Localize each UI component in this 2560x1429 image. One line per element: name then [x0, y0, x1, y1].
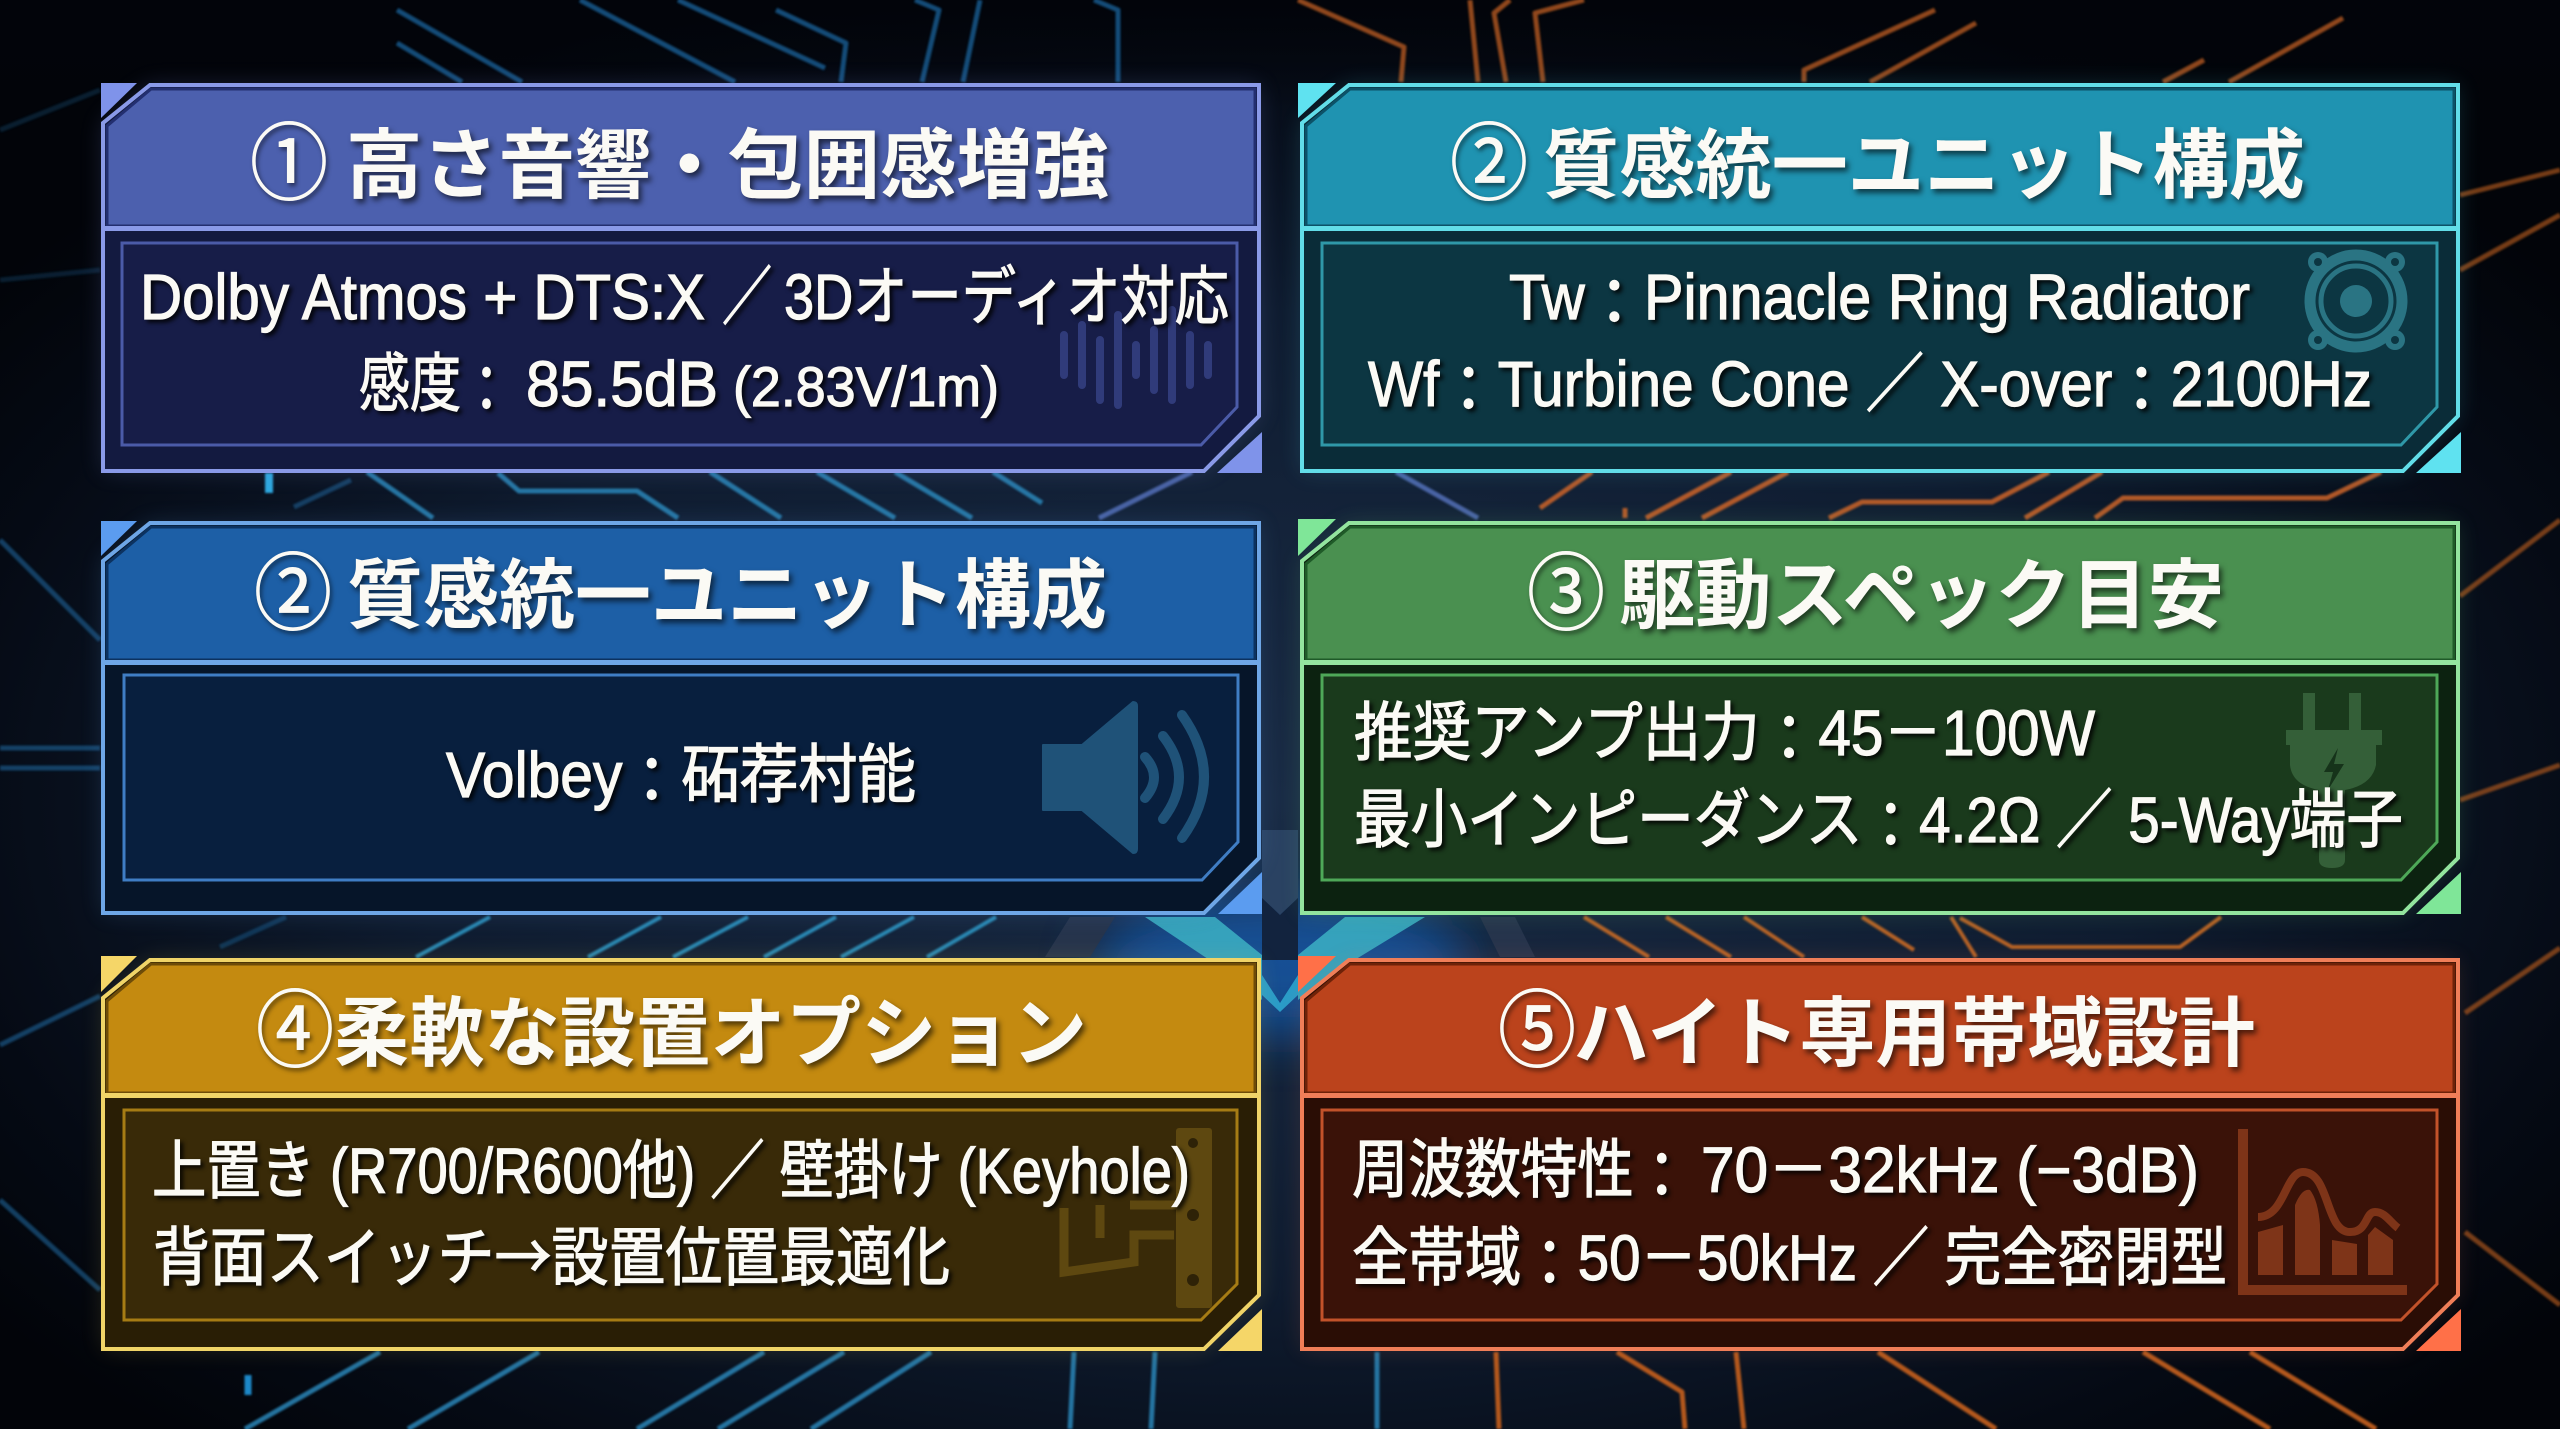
- panel 3 corner accents: [101, 521, 1262, 914]
- panel 5 divider: [104, 1093, 1258, 1098]
- panel 1 divider: [104, 226, 1258, 231]
- panel 2 number: ②: [1450, 117, 1528, 211]
- panel 4 line 1: ：: [1760, 703, 1818, 775]
- panel 6 body box: [1322, 1110, 2437, 1320]
- panel 4 divider: [1303, 660, 2457, 665]
- panel 2 line 2: ：: [1439, 354, 1498, 426]
- panel: 2 unit config, blue: [101, 521, 1262, 914]
- panel 5 number: ④: [256, 984, 334, 1078]
- panel 2 corner accents: [1298, 83, 2461, 473]
- panel 2 line 2: Wf: [1368, 348, 1446, 420]
- panel 2 line 1: Pinnacle Ring Radiator: [1644, 261, 2250, 333]
- panel 5 line 2: 背面スイッチ→設置位置最適化: [153, 1207, 950, 1299]
- panel 2 line 2: Turbine Cone ／ X-over: [1498, 348, 2112, 420]
- panel 3 body line: ：: [622, 745, 681, 817]
- panel 5 corner accents: [101, 956, 1262, 1351]
- panel 3 title: 質感統一ユニット構成: [347, 554, 1107, 639]
- panel 2 line 2: 2100Hz: [2171, 348, 2372, 420]
- panel 1 number: ①: [250, 117, 328, 211]
- panel 5 body box: [124, 1110, 1237, 1320]
- panel 4 line 1: 45－100W: [1818, 697, 2096, 769]
- icon: frequency chart: [2238, 1129, 2407, 1295]
- panel 2 header: [1306, 89, 2454, 226]
- panel 6 line 2: 50－50kHz ／ 完全密閉型: [1578, 1222, 2227, 1294]
- panel: 2 unit config: [1298, 83, 2461, 473]
- panel 1 line 2: 感度: [359, 348, 487, 420]
- panel 1 line 2: ：: [461, 354, 512, 426]
- panel 4 body box: [1322, 675, 2437, 880]
- panel: 3 drive specs: [1298, 519, 2461, 914]
- panel: 5 high band design: [1298, 956, 2461, 1351]
- panel 1 line 1: 3Dオーディオ対応: [784, 261, 1229, 333]
- panel 4 line 1: 推奨アンプ出力: [1354, 697, 1798, 769]
- panel 6 line 1: 70－32kHz (−3dB): [1701, 1134, 2199, 1206]
- panel 4 title: 駆動スペック目安: [1619, 554, 2224, 639]
- centre chip highlights: [1045, 917, 1535, 1012]
- panel 6 title: ハイト専用帯域設計: [1573, 992, 2255, 1077]
- panel 6 line 1: ：: [1634, 1140, 1690, 1212]
- panel 6 header: [1306, 964, 2454, 1093]
- circuit traces: orange: [1298, 0, 2560, 1429]
- panel: 4 placement options: [101, 956, 1262, 1351]
- panel 1 line 1: [140, 261, 1229, 333]
- circuit traces: blue: [0, 0, 1478, 1429]
- panel 1 title: 高さ音響・包囲感増強: [346, 124, 1109, 209]
- panel 4 line 2: 4.2Ω ／ 5-Way端子: [1919, 784, 2403, 856]
- panel 2 divider: [1303, 226, 2457, 231]
- panel 3 body box: [124, 675, 1238, 880]
- panel 1 line 1: ／: [722, 261, 772, 333]
- panel 4 line 2: 最小インピーダンス: [1354, 784, 1929, 856]
- icon: speaker driver: [2308, 252, 2405, 350]
- panel 1 line 2: 85.5dB: [526, 348, 718, 420]
- panel 6 line 2: ：: [1521, 1228, 1578, 1300]
- panel 2 body box: [1322, 243, 2437, 445]
- panel 1 body box: [122, 243, 1237, 445]
- panel 6 divider: [1303, 1093, 2457, 1098]
- panel 1 line 2: [359, 348, 999, 426]
- panel 3 body line: Volbey: [446, 739, 638, 811]
- panel 1 line 2: (2.83V/1m): [733, 355, 999, 418]
- panel 4 header: [1306, 527, 2454, 660]
- panel 2 line 1: ：: [1585, 267, 1644, 339]
- panel 1 line 1: Dolby Atmos + DTS:X: [140, 261, 705, 333]
- panel 2 line 2: ：: [2112, 354, 2171, 426]
- panel 4 corner accents: [1298, 519, 2461, 914]
- panel 6 line 1: [1352, 1134, 2199, 1212]
- panel 4 line 2: ：: [1862, 790, 1919, 862]
- panel 3 body line: 砳荐村能: [681, 739, 916, 811]
- panel 6 line 2: 全帯域: [1352, 1222, 1544, 1294]
- panel 2 line 1: Tw: [1509, 261, 1591, 333]
- panel 3 header: [107, 527, 1255, 660]
- panel 3 number: ②: [254, 547, 332, 641]
- panel 6 corner accents: [1298, 956, 2461, 1351]
- panel 5 line 1: 上置き (R700/R600他) ／ 壁掛け (Keyhole): [152, 1135, 1190, 1207]
- panel 1 header: [107, 89, 1255, 226]
- panel 5 title: 柔軟な設置オプション: [334, 992, 1087, 1077]
- icon: loudspeaker: [1043, 702, 1204, 853]
- icon: power plug: [2286, 693, 2382, 868]
- panel 1 corner accents: [101, 83, 1262, 473]
- panel 2 title: 質感統一ユニット構成: [1543, 124, 2305, 209]
- panel: 1 height audio: [101, 83, 1262, 473]
- panel 5 header: [107, 964, 1255, 1093]
- panel 3 divider: [104, 660, 1258, 665]
- panel 4 number: ③: [1527, 547, 1605, 641]
- icon: sound waveform: [1064, 310, 1208, 405]
- panel 6 line 1: 周波数特性: [1352, 1134, 1672, 1206]
- panel 6 number: ⑤: [1498, 984, 1576, 1078]
- icon: wall bracket: [1064, 1128, 1212, 1308]
